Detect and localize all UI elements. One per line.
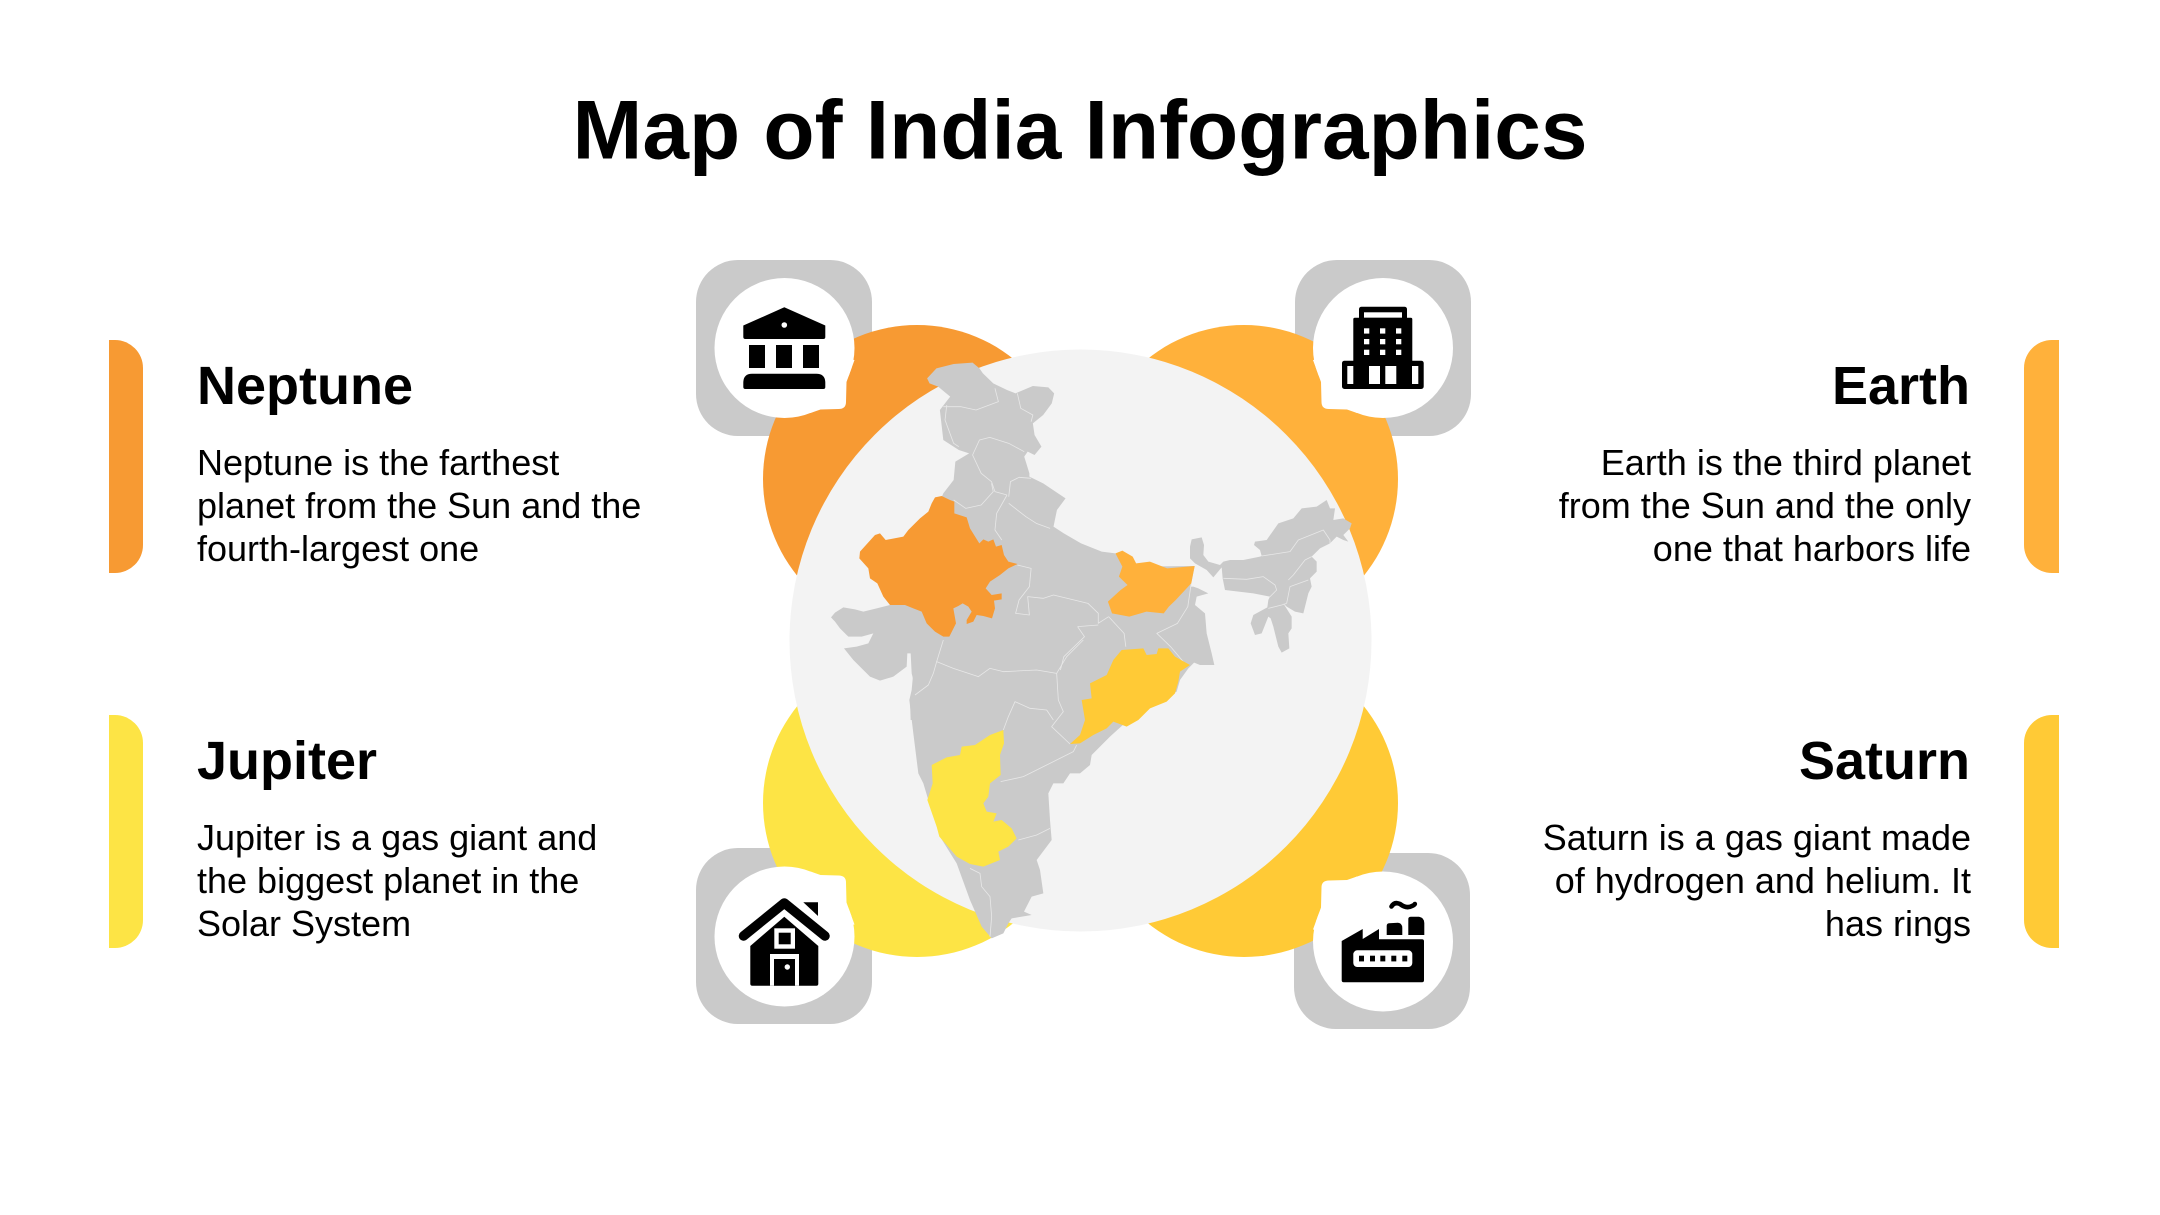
amber circle: top right [1090,325,1398,633]
heading: Jupiter: Jupiter [197,731,377,791]
orange circle: top left [763,325,1071,633]
icon: office building [1342,307,1424,389]
panel: Earth [1559,340,2059,573]
text: Jupiter description: the biggest planet in the [197,860,579,901]
icon: house [744,902,825,986]
map: southern peninsula [909,640,1213,938]
text: Saturn description: of hydrogen and helium. It [1555,860,1971,901]
accent bar: Earth [2024,340,2059,573]
icon: factory [1342,903,1424,982]
panel: Jupiter [109,715,597,948]
heading: Neptune: Neptune [197,356,413,416]
central light circle [790,350,1372,932]
text: Earth description: Earth is the third planet [1601,442,1971,483]
map: Rajasthan highlighted [859,496,1018,637]
white badge: top right [1313,278,1453,418]
yellow circle: bottom left [763,649,1071,957]
map: Odisha highlighted [1070,648,1190,744]
icon: bank [743,307,825,389]
text: Jupiter description: Jupiter is a gas giant and [197,817,597,858]
map: state borders [915,388,1330,937]
accent bar: Neptune [109,340,143,573]
title: Map of India Infographics [573,82,1587,176]
text: Neptune description: planet from the Sun and the [197,485,641,526]
panel: Neptune [109,340,641,573]
map: northern and central region [909,363,1195,670]
map: north-east and Bengal region [1160,500,1352,670]
text: Jupiter description: Solar System [197,903,411,944]
gray icon tile: top right [1295,260,1471,436]
gray icon tile: bottom left [696,848,872,1024]
map: Bihar highlighted [1108,551,1195,617]
text: Earth description: one that harbors life [1653,528,1971,569]
accent bar: Jupiter [109,715,143,948]
golden circle: bottom right [1090,649,1398,957]
panel: Saturn [1543,715,2059,948]
text: Neptune description: fourth-largest one [197,528,479,569]
map of India [831,363,1352,938]
map: western region [831,580,1060,720]
white badge: top left [714,278,854,418]
heading: Saturn: Saturn [1799,731,1970,791]
accent bar: Saturn [2024,715,2059,948]
map: Karnataka highlighted [927,730,1017,867]
white badge: bottom right [1313,872,1453,1012]
heading: Earth: Earth [1832,356,1970,416]
gray icon tile: bottom right [1294,853,1470,1029]
white badge: bottom left [714,866,854,1006]
gray icon tile: top left [696,260,872,436]
text: Saturn description: Saturn is a gas giant made [1543,817,1971,858]
text: Earth description: from the Sun and the only [1559,485,1971,526]
text: Neptune description: Neptune is the farthest [197,442,559,483]
text: Saturn description: has rings [1825,903,1971,944]
